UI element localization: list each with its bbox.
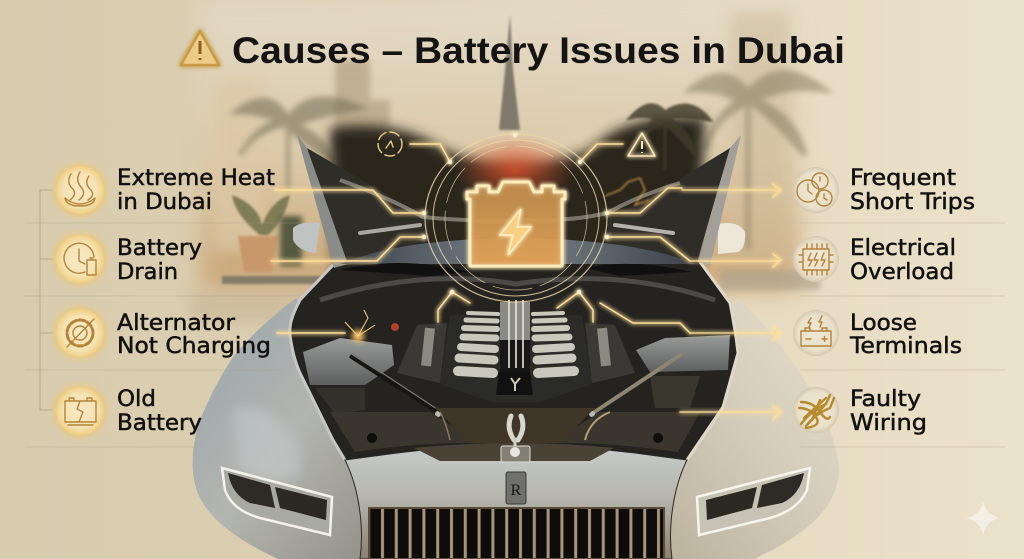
item: Extreme Heat: in Dubai [117,190,212,215]
hood cable [340,180,680,221]
item: Loose Terminals [793,310,962,359]
item: Alternator Not Charging: Alternator [117,311,236,336]
item: Electrical Overload [793,236,956,285]
grille [369,508,664,559]
item: Frequent Short Trips [793,166,975,215]
warning icon [181,31,219,65]
item: Extreme Heat [53,163,275,217]
windshield band [340,238,696,264]
icon: frayed wires [799,395,834,428]
right engine block [585,323,635,383]
nose [345,446,687,559]
engine cover [440,315,592,402]
bay rim right [687,262,738,460]
icon: clock and battery [64,243,96,275]
right ribs [533,313,574,373]
item: Frequent Short Trips: Frequent [850,166,956,191]
spark right hood [605,178,650,205]
engine bay [290,262,738,460]
item: Faulty Wiring: Faulty [850,387,921,412]
left headlight [222,468,332,535]
hood right underside [607,148,730,262]
battery body [467,182,565,266]
small palm right of tower [630,105,710,170]
lightning bolt [500,209,531,255]
icon: crossed gear [67,319,94,347]
dark foliage behind hood [330,117,705,272]
item: Extreme Heat: Extreme Heat [117,166,275,191]
RR badge [506,472,526,504]
heading: Causes – Battery Issues in Dubai [232,30,845,71]
right arrows [680,184,781,419]
small gauge icon [378,132,402,156]
left bracket line [40,190,53,410]
spark left terminal [345,310,375,342]
right headlight [697,468,810,535]
engine badge [496,372,533,395]
icon: battery with sparks [801,316,831,346]
bay rim left [290,265,345,460]
car body [193,223,839,559]
right fender [630,298,839,559]
item: Old Battery: Battery [117,411,202,436]
center strip [500,300,530,372]
item: Loose Terminals: Loose [850,311,917,336]
heat glow [455,134,575,206]
reservoirs and struts [303,323,730,417]
small warning icon [628,133,655,156]
lower bay panels [330,408,700,452]
item: Old Battery [53,384,202,438]
left engine block [397,323,447,383]
RR badge: R [511,482,522,499]
blurred Dubai skyline [190,0,825,323]
item: Battery Drain [53,232,202,286]
icon: circuit chip [799,244,833,275]
item: Alternator Not Charging: Not Charging [117,334,271,359]
item: Faulty Wiring [793,387,927,436]
item: Alternator Not Charging [53,306,271,360]
Spirit of Ecstasy mascot [414,416,614,462]
item: Loose Terminals: Terminals [849,334,962,359]
title [181,30,845,71]
hood right frame [698,135,741,266]
orbit rings [425,134,607,302]
left ribs [458,313,498,373]
icon: clocks [797,173,832,206]
open hood [297,135,741,300]
item: Frequent Short Trips: Short Trips [850,190,975,215]
V12 engine [397,300,635,402]
circuit lines [271,144,690,333]
item: Battery Drain: Battery [117,236,202,261]
item: Old Battery: Old [117,387,156,412]
item: Battery Drain: Drain [117,260,178,285]
hood left frame [297,135,348,268]
central battery hologram [271,133,690,333]
icon: heat waves [65,172,95,206]
item: Faulty Wiring: Wiring [850,411,927,436]
left wing mirror [293,223,320,253]
hood left underside [307,148,430,264]
left fender [193,298,400,559]
right wing mirror [718,223,745,254]
sparkle mark [966,500,1000,536]
icon: cracked battery [65,398,96,425]
dividers [25,223,1005,447]
item: Electrical Overload: Overload [850,260,954,285]
nodes [422,133,609,294]
left fender highlight [232,407,301,481]
item: Electrical Overload: Electrical [850,236,956,261]
